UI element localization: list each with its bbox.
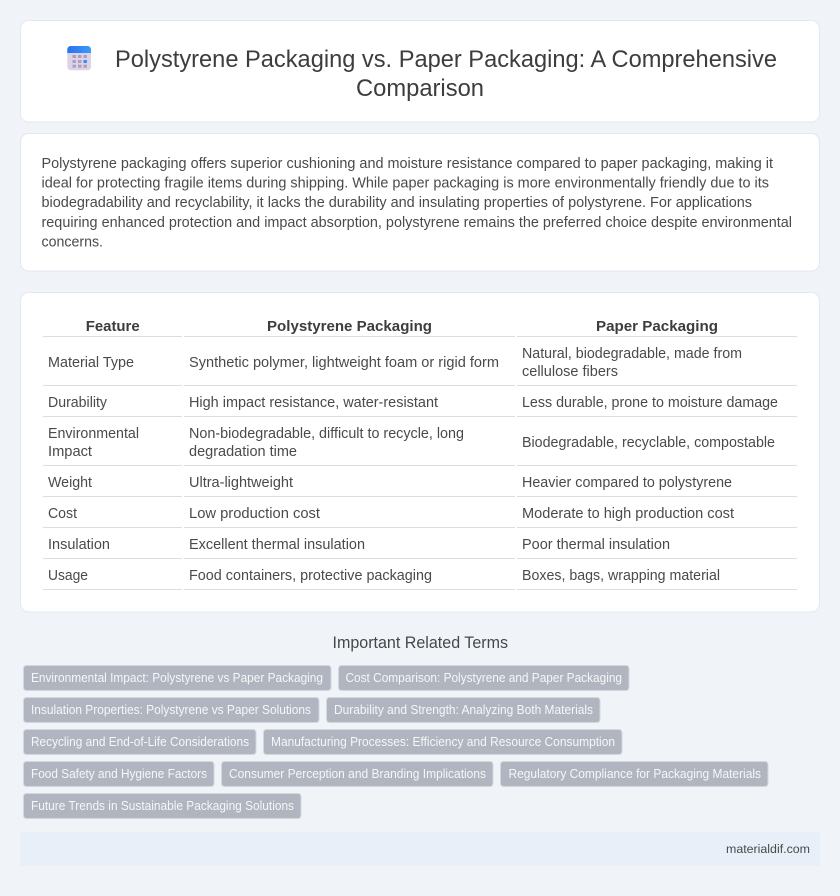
heading: important related terms: Important Related Terms [332, 634, 508, 652]
row: insulation: Insulation [48, 537, 110, 553]
row: cost: Moderate to high production cost [522, 506, 734, 522]
row: weight: Heavier compared to polystyrene [522, 475, 732, 491]
panel: related term tags [24, 666, 768, 818]
row: environmental impact: Environmental [48, 426, 139, 442]
row: environmental impact: Impact [48, 444, 92, 460]
row: durability: Less durable, prone to moisture damage [522, 395, 778, 411]
intro text block: biodegradability and recyclability, it lacks the durability and insulating properties of polystyrene. For applications [42, 195, 752, 211]
intro text block: ideal for protecting fragile items during shipping. While paper packaging is more environmentally friendly due to its [42, 176, 769, 192]
tag: insulation properties [24, 698, 319, 722]
icon: calendar grid [67, 46, 91, 70]
table header row: Paper Packaging [596, 318, 718, 335]
footer bar [20, 832, 820, 866]
panel: header [20, 20, 820, 122]
row: material type: Natural, biodegradable, made from [522, 346, 742, 362]
footer bar: materialdif.com [726, 842, 810, 856]
row: usage: Boxes, bags, wrapping material [522, 568, 720, 584]
row: durability: High impact resistance, water-resistant [189, 395, 438, 411]
tag: manufacturing processes: Manufacturing Processes: Efficiency and Resource Consumption [271, 735, 615, 749]
tag: food safety: Food Safety and Hygiene Factors [31, 767, 207, 781]
row: insulation: Excellent thermal insulation [189, 537, 365, 553]
row: material type [48, 346, 742, 380]
row: usage: Food containers, protective packaging [189, 568, 432, 584]
tag: future trends: Future Trends in Sustainable Packaging Solutions [31, 799, 294, 813]
row: insulation: Poor thermal insulation [522, 537, 670, 553]
row: environmental impact: degradation time [189, 444, 297, 460]
row: weight [48, 475, 732, 491]
tag: durability and strength: Durability and Strength: Analyzing Both Materials [334, 703, 593, 717]
row: cost: Low production cost [189, 506, 320, 522]
row: material type: Synthetic polymer, lightweight foam or rigid form [189, 355, 499, 371]
intro text block [42, 156, 792, 250]
intro text block: concerns. [42, 234, 103, 250]
tag: cost comparison [338, 666, 629, 690]
tag: environmental impact: Environmental Impact: Polystyrene vs Paper Packaging [31, 671, 323, 685]
tag: food safety [24, 762, 214, 786]
panel: introduction [20, 134, 820, 271]
row: environmental impact: Biodegradable, recyclable, compostable [522, 435, 775, 451]
tag: regulatory compliance [500, 762, 768, 786]
row: environmental impact [48, 426, 775, 460]
row: material type: cellulose fibers [522, 364, 618, 380]
tag: future trends [24, 794, 301, 818]
table header row: Polystyrene Packaging [267, 318, 432, 335]
row: usage: Usage [48, 568, 88, 584]
row: material type: Material Type [48, 355, 134, 371]
title [115, 46, 777, 102]
row: usage [48, 568, 720, 584]
intro text block: requiring enhanced protection and impact absorption, polystyrene remains the preferred choice despite environmental [42, 215, 792, 231]
tag: environmental impact [24, 666, 331, 690]
intro text block: Polystyrene packaging offers superior cushioning and moisture resistance compared to paper packaging, making it [42, 156, 773, 172]
table header row [86, 318, 718, 335]
tag: insulation properties: Insulation Properties: Polystyrene vs Paper Solutions [31, 703, 311, 717]
row: cost: Cost [48, 506, 77, 522]
row: durability [48, 395, 778, 411]
tag: regulatory compliance: Regulatory Compliance for Packaging Materials [508, 767, 761, 781]
tag: recycling: Recycling and End-of-Life Considerations [31, 735, 249, 749]
tag: cost comparison: Cost Comparison: Polystyrene and Paper Packaging [346, 671, 622, 685]
panel: comparison table [20, 292, 820, 612]
tag: consumer perception [222, 762, 493, 786]
tag: durability and strength [326, 698, 600, 722]
tag: manufacturing processes [264, 730, 622, 754]
row: environmental impact: Non-biodegradable, difficult to recycle, long [189, 426, 464, 442]
title: Comparison [356, 75, 484, 102]
row: cost [48, 506, 734, 522]
row: weight: Ultra-lightweight [189, 475, 293, 491]
row: insulation [48, 537, 670, 553]
tag: recycling [24, 730, 256, 754]
row: weight: Weight [48, 475, 92, 491]
title: Polystyrene Packaging vs. Paper Packaging: A Comprehensive [115, 46, 777, 73]
table header row: Feature [86, 318, 140, 335]
tag: consumer perception: Consumer Perception and Branding Implications [229, 767, 486, 781]
row: durability: Durability [48, 395, 108, 411]
